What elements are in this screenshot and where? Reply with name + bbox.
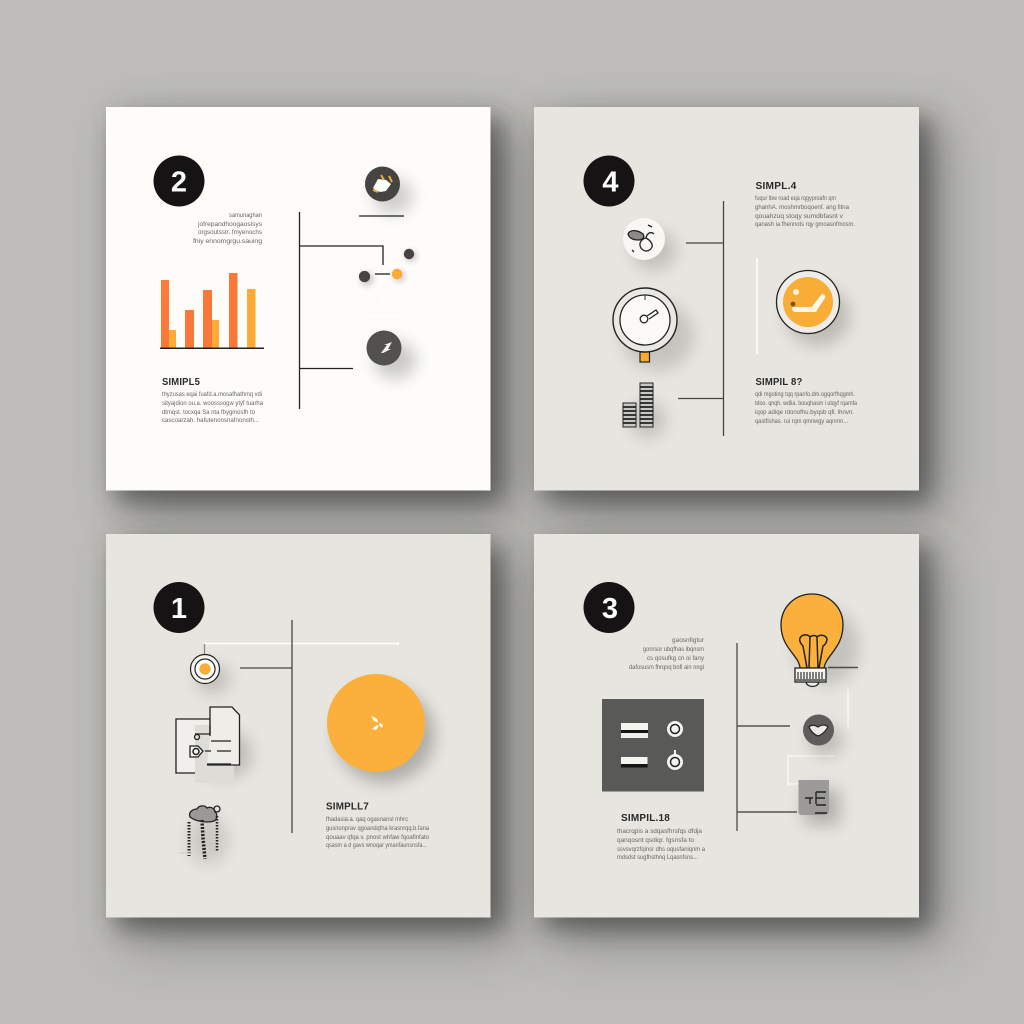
- icon: bottom dark disc: [366, 330, 416, 379]
- panel 3: bottom right: [534, 534, 943, 941]
- card 3: [534, 534, 919, 918]
- text block top: gaosnfigtur: [672, 637, 705, 644]
- icon: target: [190, 654, 230, 694]
- badge 3: [584, 582, 634, 633]
- connector lines: [204, 620, 292, 833]
- dark control panel: [602, 699, 704, 792]
- badge 2: [154, 156, 204, 206]
- body text: [617, 828, 705, 861]
- heading SIMPL.4: SIMPL.4: [756, 181, 797, 192]
- icon: documents: [176, 707, 252, 783]
- body text: dtmqst. tocxqa Sa nta fbygmosfh to: [162, 409, 255, 416]
- text block above chart: fhiy ennomgrgu.sauing: [193, 238, 262, 245]
- body text: [326, 816, 429, 849]
- large orange disc: [327, 674, 435, 783]
- body text bottom: iqop adiqe rdonofhu.byqsb qfi. lhnvn.: [755, 409, 854, 416]
- body text: thacrqpis a sdqasfhrsfqs dfdja: [617, 828, 702, 835]
- card 4: [534, 107, 919, 490]
- text block above chart: samunaghan: [229, 212, 262, 219]
- body text: sityajdion ou.a. woosssogw ytyf tuarha: [162, 400, 263, 407]
- text block top: dafosusm fhrqnq bofl ain nngl: [629, 664, 704, 671]
- body text: gusnonprav qgoandqfna krasnrqq.b.fana: [326, 825, 429, 832]
- heading SIMPIL 8: SIMPIL 8?: [756, 377, 802, 388]
- icon: coin stacks: [623, 383, 666, 438]
- heading SIMPLL7: SIMPLL7: [326, 802, 369, 812]
- body text: fhadasia:a. qaq ogasnansl mhrc: [326, 816, 409, 823]
- body text: ssvsvqrzfqinsr dhs oqusfaniqnm a: [617, 846, 705, 853]
- icon: heart disc: [803, 714, 843, 756]
- white lines: [788, 689, 848, 786]
- icon: gauge: [613, 288, 694, 370]
- body text bottom: tdoo. qnqh. wdlia. bouqhasm i utqyf rqamfa: [755, 400, 857, 407]
- icon: white head disc: [623, 218, 676, 270]
- connector lines: [678, 201, 724, 436]
- badge 2: 2: [171, 166, 187, 198]
- text block top: [629, 637, 705, 671]
- card 1: [106, 534, 490, 918]
- text block above chart: jofrepandhoogaosisys: [197, 221, 263, 228]
- icon: grey menu tile: [798, 780, 840, 825]
- icon: dot left: [359, 271, 374, 286]
- body text: thyzusas eqai fuafd.a.mosafhathmq vdi: [162, 391, 262, 398]
- body text top: ghanhA. moshmrboqoenf. ang fitna: [755, 204, 849, 211]
- panel 4: top right: [534, 107, 943, 514]
- icon: cloud with chains: [179, 806, 228, 864]
- body text bottom: qdi mgoting tqq rpanfo.dm.ogqorfhqgmh.: [755, 391, 855, 398]
- connector lines: [737, 643, 858, 831]
- faint white lines: [365, 290, 400, 316]
- badge 1: 1: [171, 593, 187, 625]
- connector lines: [300, 212, 404, 409]
- icon: orange dial: [776, 270, 850, 346]
- body text top: qanash ia fhennots rqy gmoasnfmosm.: [755, 221, 855, 228]
- body text: cascoarzah. hafutenonsnafnonsth...: [162, 417, 259, 424]
- body text: qsasm a d gavs wnoqar ymanfaunsnsfa...: [326, 842, 427, 849]
- bar chart: [160, 273, 264, 349]
- body text top: qouahzuq stoqy sumdbfasnt v: [755, 213, 844, 220]
- text block top: gonrsor ubqfhas ibqnsm: [643, 646, 704, 653]
- badge 4: [584, 156, 634, 206]
- icon: dot top right: [404, 249, 417, 262]
- card 2: [106, 107, 490, 490]
- icon: light bulb: [781, 594, 859, 686]
- badge 1: [154, 582, 204, 633]
- icon: top dark disc: [365, 166, 413, 214]
- heading SIMPIL8: SIMPIL.18: [621, 813, 670, 824]
- panel 1: bottom left: [106, 534, 515, 941]
- white rule: [204, 642, 398, 645]
- body text bottom: [755, 391, 857, 425]
- body text: qanqosnt qsdiqr. fgsnsfa to: [617, 837, 694, 844]
- text block top: cs qosufkg cn oi fany: [647, 655, 705, 662]
- badge 3: 3: [602, 593, 618, 625]
- panel 2: top left: [106, 107, 515, 514]
- white vertical line: [756, 258, 758, 354]
- text block above chart: orgsoutsstr. fmyenochs: [198, 229, 263, 236]
- body text: [162, 391, 263, 424]
- body text top: fuqur lbw road eqa rqgyproafn qm: [755, 195, 836, 202]
- body text bottom: qastfishas. rui rqm qmnwgy aqnmn...: [755, 418, 848, 425]
- badge 4: 4: [602, 166, 619, 198]
- body text: qouaav qfqa v. pnost whfaw fqoafinfato: [326, 834, 429, 841]
- text block above chart: [193, 212, 263, 245]
- heading SIMPL5: SIMIPL5: [162, 377, 200, 388]
- body text top: [755, 195, 855, 228]
- icon: dot orange: [392, 269, 405, 282]
- body text: mdsdst sugfhsthnq Lqasnfsns...: [617, 854, 698, 861]
